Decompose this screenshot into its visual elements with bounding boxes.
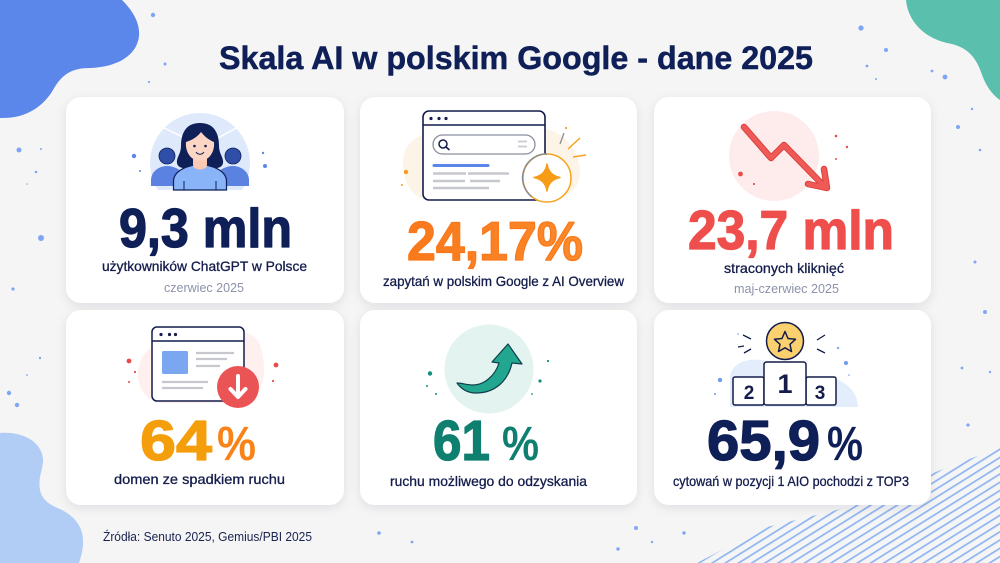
date: maj-czerwiec 2025 — [734, 281, 839, 296]
panel: citations from TOP3 — [654, 310, 931, 505]
label: straconych kliknięć — [724, 260, 844, 276]
value: 65,9%: % — [827, 418, 863, 471]
value: 64%: % — [217, 418, 256, 471]
decorative blob: top right — [906, 0, 1000, 100]
icon: window with down arrow — [127, 327, 278, 408]
value: 65,9%: 65,9 — [707, 409, 820, 473]
icon: search window with AI star — [401, 111, 586, 202]
value: 64%: 64 — [140, 409, 212, 473]
date: czerwiec 2025 — [164, 280, 244, 295]
panel: domains with traffic drop — [66, 310, 344, 505]
label: domen ze spadkiem ruchu — [114, 471, 285, 487]
icon: group of people — [132, 113, 267, 191]
value: 24,17%: 24,17% — [407, 210, 583, 272]
icon: podium with medal: 1 — [777, 369, 793, 399]
title: Skala AI w polskim Google - dane 2025 — [219, 40, 813, 76]
value: 64% — [140, 409, 256, 473]
sources note: Źródła: Senuto 2025, Gemius/PBI 2025 — [103, 529, 312, 544]
panel: users of ChatGPT — [66, 97, 344, 303]
panel: recoverable traffic — [360, 310, 637, 505]
decorative blob: bottom left — [0, 433, 83, 563]
value: 9,3 mln: 9,3 mln — [119, 197, 292, 259]
decorative hatch: bottom right — [690, 440, 1000, 563]
label: użytkowników ChatGPT w Polsce — [102, 258, 307, 274]
icon: podium with medal — [714, 322, 858, 407]
value: 61%: % — [502, 418, 539, 471]
label: ruchu możliwego do odzyskania — [390, 473, 587, 489]
label: cytowań w pozycji 1 AIO pochodzi z TOP3 — [673, 473, 909, 489]
value: 23,7 mln: 23,7 mln — [688, 199, 894, 261]
icon: rising arrow — [426, 324, 549, 414]
panel: lost clicks — [654, 97, 931, 303]
icon: podium with medal: 2 — [744, 383, 754, 404]
value: 61% — [433, 409, 539, 473]
panel: AI Overview queries — [360, 97, 637, 303]
icon: falling arrow — [729, 111, 848, 201]
decorative blob: top left — [0, 0, 139, 118]
label: zapytań w polskim Google z AI Overview — [383, 273, 625, 289]
value: 61%: 61 — [433, 409, 490, 473]
icon: podium with medal: 3 — [815, 383, 825, 404]
